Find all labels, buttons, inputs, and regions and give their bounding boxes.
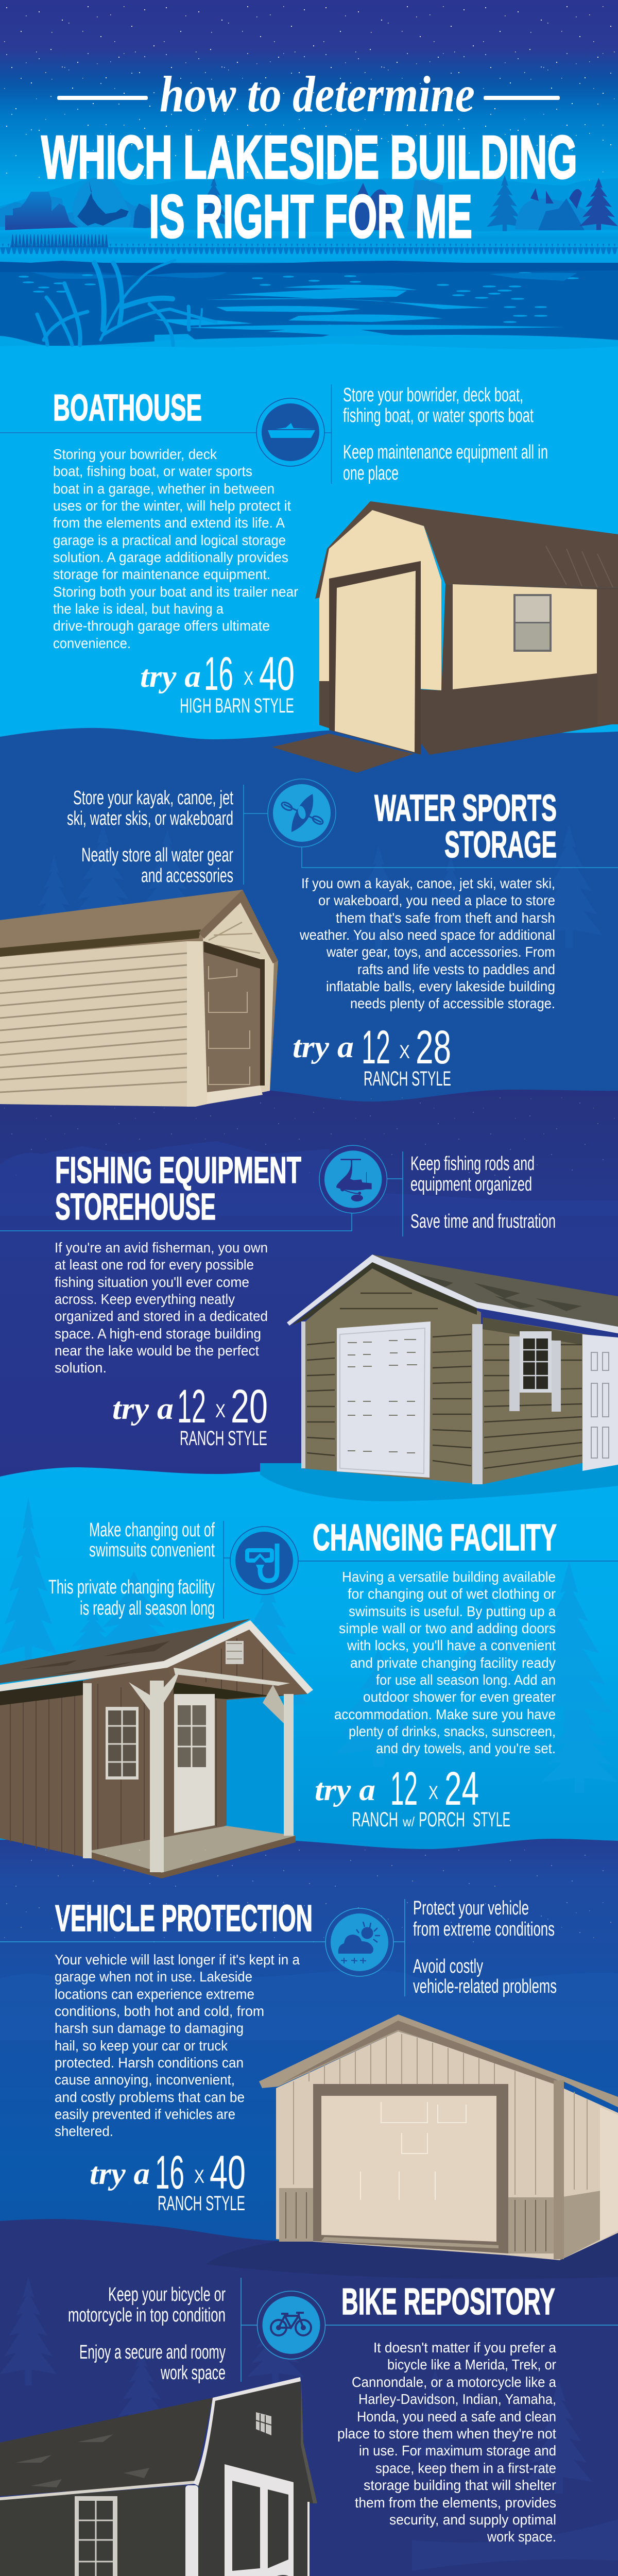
bike body text: Cannondale, or a motorcycle like a xyxy=(352,2374,556,2390)
water sports body text: them that's safe from theft and harsh xyxy=(336,910,555,926)
vehicle bullet points xyxy=(413,1897,557,1997)
bike bullet points: Enjoy a secure and roomy xyxy=(79,2342,226,2363)
size callout: 12 x 24 ranch with porch: try a xyxy=(315,1773,375,1807)
size callout: 16 x 40 ranch: 40 xyxy=(210,2146,246,2199)
size callout: 12 x 28 ranch: X xyxy=(399,1041,410,1062)
changing facility body text: for use all season long. Add an xyxy=(376,1672,556,1688)
changing facility body text: for changing out of wet clothing or xyxy=(348,1586,556,1602)
building: high barn boathouse xyxy=(272,501,618,773)
size callout: 12 x 24 ranch with porch: X xyxy=(428,1782,438,1803)
changing facility body text: with locks, you'll have a convenient xyxy=(347,1637,556,1653)
boathouse bullet points: one place xyxy=(343,463,399,484)
changing facility body text: simple wall or two and adding doors xyxy=(339,1620,556,1636)
icon: kayak xyxy=(268,779,336,847)
icon: boat xyxy=(256,398,324,466)
boathouse body text: garage is a practical and logical storage xyxy=(53,532,286,548)
boathouse body text: boat, fishing boat, or water sports xyxy=(53,463,252,479)
size callout: 16 x 40 high barn: X xyxy=(244,668,253,689)
bike body text: them from the elements, provides xyxy=(355,2495,556,2511)
lake scene illustration xyxy=(0,175,618,371)
building shadow xyxy=(260,1463,618,1501)
boathouse body text: uses or for the winter, will help protect it xyxy=(53,498,291,514)
water sports bullet points: and accessories xyxy=(141,865,233,887)
water sports body text: needs plenty of accessible storage. xyxy=(350,995,555,1011)
size callout: 16 x 40 ranch: RANCH STYLE xyxy=(158,2192,245,2215)
boathouse body text: the lake is ideal, but having a xyxy=(53,601,224,617)
decorative stars xyxy=(0,1097,618,1190)
changing facility body text: swimsuits is useful. By putting up a xyxy=(349,1603,556,1619)
boathouse body text: storage for maintenance equipment. xyxy=(53,566,270,582)
size callout: 12 x 20 ranch: RANCH STYLE xyxy=(180,1427,267,1450)
vehicle body text xyxy=(55,1952,300,2139)
water sports body text: rafts and life vests to paddles and xyxy=(357,961,555,977)
size callout: 16 x 40 ranch: X xyxy=(194,2166,204,2187)
bike body text: work space. xyxy=(487,2529,556,2545)
vehicle bullet points: Avoid costly xyxy=(413,1956,483,1977)
panel: vehicle protection background xyxy=(0,1839,618,2267)
fishing heading xyxy=(55,1150,301,1228)
title: how to determine: how to determine xyxy=(160,65,475,123)
water sports body text: If you own a kayak, canoe, jet ski, water ski, xyxy=(301,875,555,891)
boathouse body text: convenience. xyxy=(53,635,131,651)
boathouse body text: Storing both your boat and its trailer near xyxy=(53,584,298,600)
vehicle body text: sheltered. xyxy=(55,2123,113,2139)
bike body text: security, and supply optimal xyxy=(389,2512,556,2528)
decorative faint treeline xyxy=(0,1969,618,2040)
fishing bullet points xyxy=(410,1153,556,1232)
size callout: 12 x 24 ranch with porch: STYLE xyxy=(473,1808,510,1831)
water sports body text: weather. You also need space for additional xyxy=(299,927,555,943)
vehicle body text: garage when not in use. Lakeside xyxy=(55,1969,252,1985)
building: olive ranch storehouse xyxy=(287,1255,618,1484)
changing facility body text: Having a versatile building available xyxy=(342,1569,556,1585)
fishing body text: at least one rod for every possible xyxy=(55,1257,254,1273)
boathouse body text: Storing your bowrider, deck xyxy=(53,446,217,462)
decorative faint treeline and reeds xyxy=(0,1141,618,1216)
bike body text: place to store them when they're not xyxy=(337,2426,556,2442)
bike body text: storage building that will shelter xyxy=(364,2477,556,2493)
changing facility body text: and private changing facility ready xyxy=(350,1655,556,1671)
panel: water sports background xyxy=(0,728,618,1133)
water sports bullet points: Neatly store all water gear xyxy=(81,844,233,866)
size callout: 16 x 40 ranch: try a xyxy=(90,2157,150,2191)
decorative faint trees xyxy=(0,2277,618,2571)
vehicle bullet points: Protect your vehicle xyxy=(413,1897,529,1919)
vehicle bullet points: from extreme conditions xyxy=(413,1919,555,1940)
vehicle body text: cause annoying, inconvenient, xyxy=(55,2072,235,2088)
size callout: 16 x 40 ranch xyxy=(90,2146,246,2215)
boathouse bullet points xyxy=(343,384,548,484)
fishing body text xyxy=(55,1240,268,1376)
boathouse body text: drive-through garage offers ultimate xyxy=(53,618,270,634)
boathouse body text: boat in a garage, whether in between xyxy=(53,481,274,497)
bike bullet points xyxy=(68,2284,226,2384)
panel: bike repository background xyxy=(0,2219,618,2576)
size callout: 12 x 24 ranch with porch: 12 xyxy=(390,1762,418,1815)
size callout: 12 x 24 ranch with porch: 24 xyxy=(444,1762,479,1815)
changing facility bullet points: is ready all season long xyxy=(80,1598,215,1619)
decorative stars xyxy=(0,47,618,181)
icon: weather xyxy=(325,1908,393,1976)
size callout: 12 x 24 ranch with porch: RANCH xyxy=(352,1808,398,1831)
bike bullet points: motorcycle in top condition xyxy=(68,2304,226,2326)
decorative faint trees xyxy=(31,824,603,953)
changing facility dividers xyxy=(224,1521,618,1619)
vehicle body text: harsh sun damage to damaging xyxy=(55,2020,244,2036)
bike bullet points: work space xyxy=(160,2362,226,2384)
water sports bullet points: ski, water skis, or wakeboard xyxy=(67,808,233,829)
size callout: 12 x 24 ranch with porch xyxy=(315,1762,510,1831)
size callout: 12 x 28 ranch: try a xyxy=(293,1030,354,1064)
water sports body text: or wakeboard, you need a place to store xyxy=(318,892,555,908)
size callout: 16 x 40 high barn: 16 xyxy=(204,648,233,700)
water sports body text: inflatable balls, every lakeside building xyxy=(326,978,555,994)
bike body text xyxy=(337,2340,556,2545)
title: which lakeside building is right for me xyxy=(41,123,577,251)
bike bullet points: Keep your bicycle or xyxy=(108,2284,226,2306)
size callout: 12 x 20 ranch: 12 xyxy=(177,1380,206,1433)
size callout: 16 x 40 ranch: 16 xyxy=(155,2146,184,2199)
size callout: 12 x 24 ranch with porch: w/ xyxy=(402,1814,415,1829)
building: tan ranch water sports storage xyxy=(0,890,278,1107)
fishing body text: near the lake would be the perfect xyxy=(55,1343,259,1359)
panel: changing facility background xyxy=(0,1467,618,1855)
changing facility bullet points: swimsuits convenient xyxy=(89,1539,215,1561)
vehicle body text: easily prevented if vehicles are xyxy=(55,2106,235,2122)
size callout: 16 x 40 high barn: 40 xyxy=(259,648,295,700)
size callout: 12 x 20 ranch: try a xyxy=(112,1392,174,1426)
size callout: 12 x 20 ranch xyxy=(112,1380,268,1450)
fishing body text: fishing situation you'll ever come xyxy=(55,1274,249,1290)
water sports dividers xyxy=(244,785,618,885)
building: dark high barn bike repository xyxy=(0,2377,317,2576)
bike dividers xyxy=(241,2278,618,2382)
changing facility body text: plenty of drinks, snacks, sunscreen, xyxy=(349,1723,556,1739)
size callout: 12 x 28 ranch: 28 xyxy=(416,1021,451,1074)
vehicle body text: Your vehicle will last longer if it's kept in a xyxy=(55,1952,300,1968)
changing facility body text: outdoor shower for even greater xyxy=(363,1689,556,1705)
boathouse dividers xyxy=(0,384,332,484)
changing facility bullet points: Make changing out of xyxy=(89,1519,215,1541)
icon: bicycle xyxy=(258,2291,325,2359)
panel: boathouse background xyxy=(0,355,618,747)
fishing body text: organized and stored in a dedicated xyxy=(55,1308,268,1324)
decorative faint trees xyxy=(0,1497,618,1793)
size callout: 12 x 28 ranch: RANCH STYLE xyxy=(364,1067,451,1090)
size callout: 12 x 28 ranch: 12 xyxy=(362,1021,390,1074)
changing facility bullet points: This private changing facility xyxy=(48,1577,215,1598)
boathouse body text: from the elements and extend its life. A xyxy=(53,515,285,531)
boathouse bullet points: Store your bowrider, deck boat, xyxy=(343,384,523,406)
water sports body text xyxy=(299,875,555,1011)
boathouse body text: solution. A garage additionally provides xyxy=(53,549,288,565)
vehicle body text: conditions, both hot and cold, from xyxy=(55,2003,264,2019)
fishing dividers xyxy=(0,1151,403,1236)
fishing heading: FISHING EQUIPMENT xyxy=(55,1150,301,1191)
size callout: 12 x 28 ranch xyxy=(293,1021,451,1090)
vehicle dividers xyxy=(0,1899,405,1996)
changing facility bullet points xyxy=(48,1519,215,1619)
vehicle body text: locations can experience extreme xyxy=(55,1986,254,2002)
size callout: 12 x 20 ranch: X xyxy=(215,1400,226,1421)
icon: fishing reel xyxy=(319,1145,387,1213)
bike body text: It doesn't matter if you prefer a xyxy=(373,2340,556,2355)
building: brown porch changing facility xyxy=(0,1619,313,1878)
icon: snorkel mask xyxy=(230,1527,298,1595)
bike body text: space, keep them in a first-rate xyxy=(375,2460,556,2476)
bike body text: in use. For maximum storage and xyxy=(359,2443,556,2459)
decorative stars xyxy=(0,0,618,149)
bike body text: bicycle like a Merida, Trek, or xyxy=(387,2357,556,2372)
water sports heading xyxy=(374,788,557,866)
panel: fishing background xyxy=(0,1088,618,1494)
changing facility body text: and dry towels, and you're set. xyxy=(376,1740,556,1756)
size callout: 16 x 40 high barn: try a xyxy=(140,659,201,693)
water sports bullet points: Store your kayak, canoe, jet xyxy=(73,787,233,809)
background: night sky xyxy=(0,0,618,242)
bike body text: Honda, you need a safe and clean xyxy=(357,2409,556,2425)
changing facility body text xyxy=(334,1569,556,1756)
fishing bullet points: Keep fishing rods and xyxy=(410,1153,535,1175)
boathouse heading: BOATHOUSE xyxy=(53,387,202,429)
fishing body text: solution. xyxy=(55,1360,107,1376)
vehicle body text: hail, so keep your car or truck xyxy=(55,2038,228,2054)
fishing bullet points: equipment organized xyxy=(410,1174,532,1195)
changing facility body text: accommodation. Make sure you have xyxy=(334,1706,556,1722)
fishing body text: across. Keep everything neatly xyxy=(55,1291,235,1307)
water sports bullet points xyxy=(67,787,233,887)
vehicle body text: protected. Harsh conditions can xyxy=(55,2055,244,2071)
fishing heading: STOREHOUSE xyxy=(55,1187,216,1228)
decorative stars xyxy=(0,1850,618,1942)
size callout: 12 x 24 ranch with porch: PORCH xyxy=(419,1808,465,1831)
building: beige ranch vehicle garage xyxy=(259,2014,618,2260)
size callout: 16 x 40 high barn xyxy=(140,648,295,717)
building shadow xyxy=(206,2231,618,2279)
vehicle heading: VEHICLE PROTECTION xyxy=(55,1898,313,1939)
vehicle body text: and costly problems that can be xyxy=(55,2089,245,2105)
boathouse body text xyxy=(53,446,298,651)
size callout: 16 x 40 high barn: HIGH BARN STYLE xyxy=(180,694,294,717)
bike body text: Harley-Davidson, Indian, Yamaha, xyxy=(358,2391,556,2407)
size callout: 12 x 20 ranch: 20 xyxy=(231,1380,268,1433)
fishing body text: If you're an avid fisherman, you own xyxy=(55,1240,268,1256)
water sports body text: water gear, toys, and accessories. From xyxy=(326,944,555,960)
fishing body text: space. A high-end storage building xyxy=(55,1326,261,1342)
